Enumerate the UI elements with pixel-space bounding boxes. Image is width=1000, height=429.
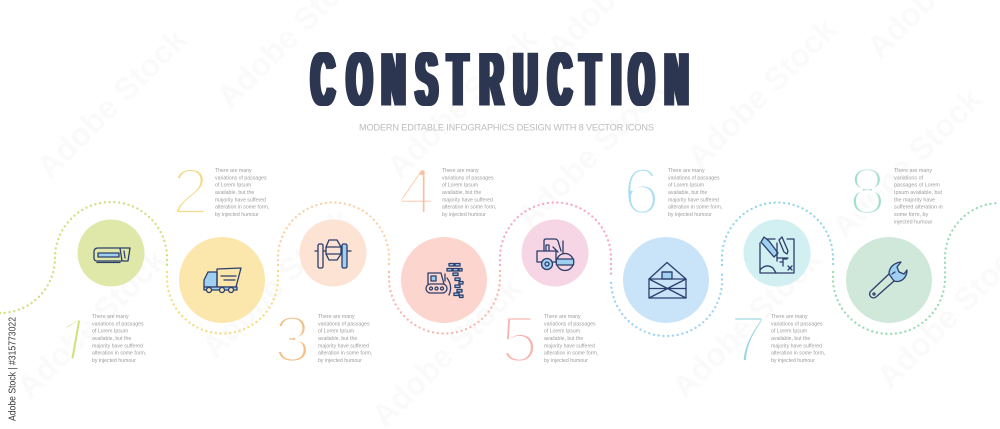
text block 2: majority have suffered bbox=[215, 197, 266, 203]
step 5: road roller bbox=[501, 220, 598, 376]
text block 7: available, but the bbox=[771, 336, 810, 342]
icon: blueprint bbox=[760, 237, 794, 273]
icon: wrench bbox=[870, 262, 907, 298]
text block 3: variations of passages bbox=[318, 321, 370, 327]
text block 8: suffered alteration in bbox=[894, 205, 943, 211]
text block 2: by injected humour bbox=[215, 212, 259, 218]
text block 5: by injected humour bbox=[544, 358, 588, 364]
text block 6: majority have suffered bbox=[668, 197, 719, 203]
text block 4: available, but the bbox=[442, 190, 481, 196]
text: Adobe Stock bbox=[379, 21, 543, 185]
text block 1: variations of passages bbox=[92, 321, 144, 327]
text block 3: by injected humour bbox=[318, 358, 362, 364]
text block 4: variations of passages bbox=[442, 175, 494, 181]
step 4: bulldozer and bricks bbox=[398, 154, 496, 323]
text block 1: alteration in some form, bbox=[92, 351, 146, 357]
text: Adobe Stock bbox=[824, 81, 988, 245]
text block 2: There are many bbox=[215, 168, 252, 174]
text block 7: by injected humour bbox=[771, 358, 815, 364]
step 2: dump truck bbox=[172, 154, 269, 323]
text block 8: injected humour bbox=[894, 219, 933, 225]
circle 5 bbox=[522, 220, 588, 286]
subtitle: MODERN EDITABLE INFOGRAPHICS DESIGN WITH 8 VECTOR ICONS bbox=[359, 122, 654, 132]
text block 2: of Lorem Ipsum bbox=[215, 183, 251, 189]
text block 7: majority have suffered bbox=[771, 343, 822, 349]
title: CONSTRUCTION bbox=[311, 38, 688, 122]
text: Adobe Stock bbox=[509, 71, 673, 235]
text block 2: alteration in some form, bbox=[215, 205, 269, 211]
circle 7 bbox=[744, 220, 810, 286]
number 3: 3 bbox=[274, 302, 311, 376]
dotted timeline bbox=[0, 202, 1000, 336]
step 8: wrench bbox=[846, 154, 943, 323]
circle 4 bbox=[401, 237, 487, 323]
text block 4: of Lorem Ipsum bbox=[442, 183, 478, 189]
number 4: 4 bbox=[398, 154, 435, 228]
icon: roller bbox=[537, 239, 574, 270]
number 5: 5 bbox=[501, 302, 538, 376]
text: Adobe Stock bbox=[194, 201, 358, 365]
text block 6: of Lorem Ipsum bbox=[668, 183, 704, 189]
text block 5: variations of passages bbox=[544, 321, 596, 327]
stock id label: Adobe Stock | #315773022 bbox=[6, 317, 18, 421]
text: Adobe Stock bbox=[9, 241, 173, 405]
icon: truck bbox=[204, 268, 241, 292]
icon: bulldozer bbox=[426, 264, 463, 298]
text block 8: some form, by bbox=[894, 212, 928, 218]
text block 1: available, but the bbox=[92, 336, 131, 342]
text block 8: the majority have bbox=[894, 197, 935, 203]
text block 6: available, but the bbox=[668, 190, 707, 196]
text block 7: There are many bbox=[771, 314, 808, 320]
step 7: blueprint bbox=[730, 220, 825, 376]
circle 3 bbox=[300, 220, 366, 286]
icon: house frame bbox=[649, 262, 686, 298]
text: Adobe Stock bbox=[679, 11, 843, 175]
circle 8 bbox=[846, 237, 932, 323]
number 2: 2 bbox=[172, 154, 209, 228]
text block 7: alteration in some form, bbox=[771, 351, 825, 357]
text block 4: by injected humour bbox=[442, 212, 486, 218]
text block 3: alteration in some form, bbox=[318, 351, 372, 357]
text: Adobe Stock bbox=[664, 241, 828, 405]
text block 4: There are many bbox=[442, 168, 479, 174]
text block 3: of Lorem Ipsum bbox=[318, 329, 354, 335]
number 8: 8 bbox=[849, 154, 886, 228]
text block 6: alteration in some form, bbox=[668, 205, 722, 211]
text block 5: available, but the bbox=[544, 336, 583, 342]
text block 6: variations of passages bbox=[668, 175, 720, 181]
text block 2: variations of passages bbox=[215, 175, 267, 181]
circle 6 bbox=[623, 237, 709, 323]
number 7: 7 bbox=[730, 302, 767, 376]
step 6: house frame bbox=[623, 154, 722, 323]
text block 1: There are many bbox=[92, 314, 129, 320]
step 1: hand saw bbox=[66, 220, 146, 363]
text: Adobe Stock bbox=[29, 21, 193, 185]
text block 4: alteration in some form, bbox=[442, 205, 496, 211]
icon: mixer bbox=[315, 240, 351, 268]
text block 8: Ipsum available, but bbox=[894, 190, 942, 196]
circle 2 bbox=[179, 237, 265, 323]
text block 5: alteration in some form, bbox=[544, 351, 598, 357]
text block 6: There are many bbox=[668, 168, 705, 174]
text block 5: majority have suffered bbox=[544, 343, 595, 349]
circle 1 bbox=[78, 220, 144, 286]
text block 5: of Lorem Ipsum bbox=[544, 329, 580, 335]
text block 8: There are many bbox=[894, 168, 932, 174]
text block 4: majority have suffered bbox=[442, 197, 493, 203]
step 3: concrete mixer bbox=[274, 220, 372, 376]
text block 3: majority have suffered bbox=[318, 343, 369, 349]
text block 7: variations of passages bbox=[771, 321, 823, 327]
number 6: 6 bbox=[623, 154, 660, 228]
icon: saw bbox=[94, 248, 130, 262]
number 1: 1 bbox=[49, 305, 99, 379]
text block 2: available, but the bbox=[215, 190, 254, 196]
text block 1: of Lorem Ipsum bbox=[92, 329, 128, 335]
text block 1: majority have suffered bbox=[92, 343, 143, 349]
text block 7: of Lorem Ipsum bbox=[771, 329, 807, 335]
text block 8: passages of Lorem bbox=[894, 183, 940, 189]
text block 3: available, but the bbox=[318, 336, 357, 342]
text block 5: There are many bbox=[544, 314, 581, 320]
text block 1: by injected humour bbox=[92, 358, 136, 364]
text block 6: by injected humour bbox=[668, 212, 712, 218]
text block 3: There are many bbox=[318, 314, 355, 320]
text block 8: variations of bbox=[894, 175, 924, 181]
